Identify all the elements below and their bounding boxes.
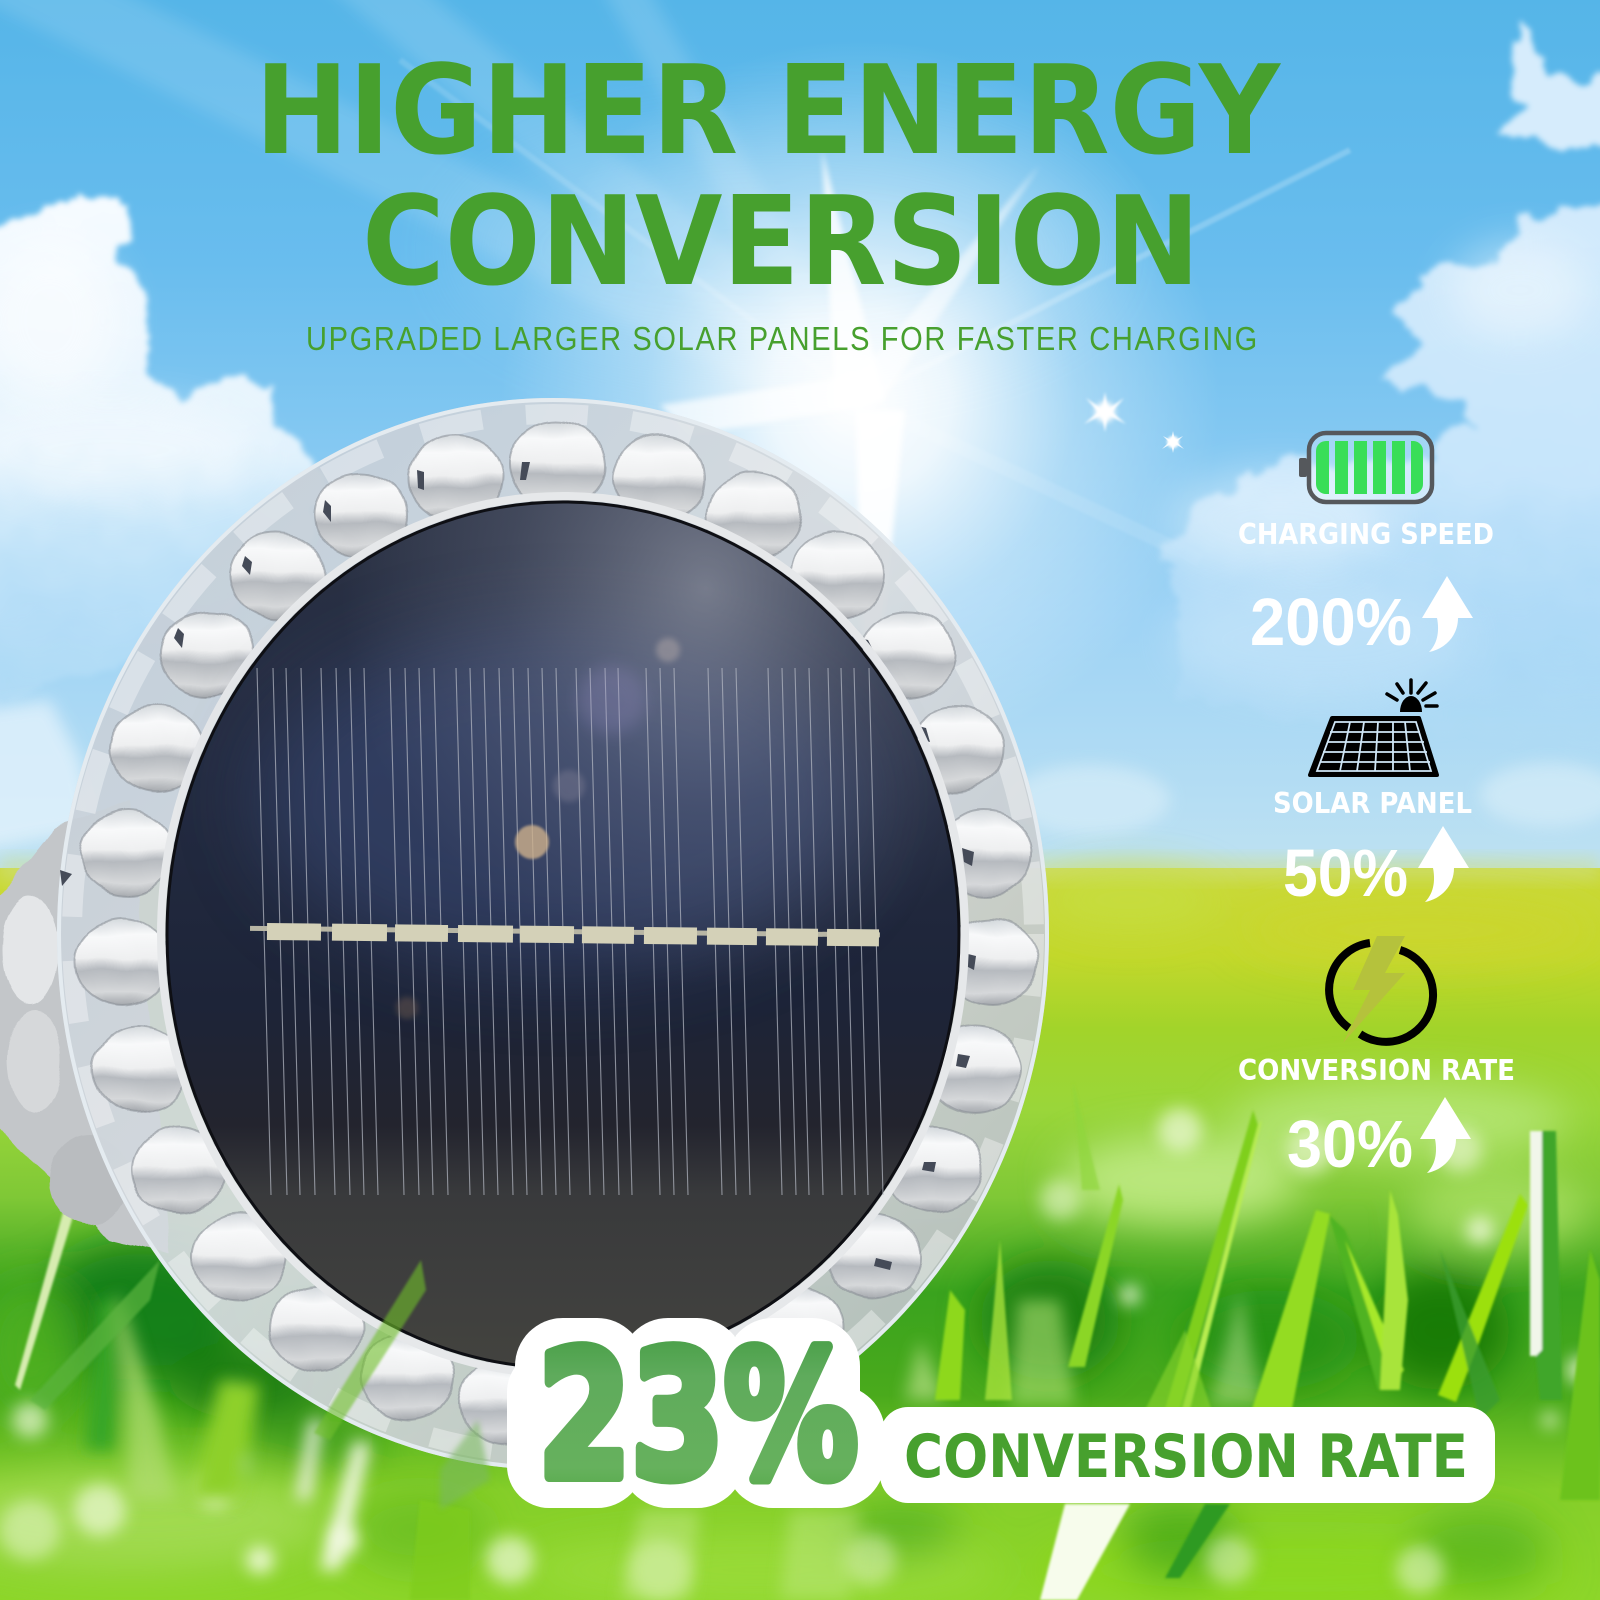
dark glass reflections — [60, 462, 976, 1270]
panel grid lines — [257, 668, 883, 1195]
grass blades — [15, 1082, 1600, 1600]
white sticker backing — [507, 1318, 1495, 1508]
value: 200% — [1250, 585, 1412, 660]
sparkles — [1084, 392, 1184, 453]
stat: conversion rate — [1238, 936, 1515, 1182]
solar lamp head — [57, 398, 1049, 1470]
solar panel disc — [167, 502, 959, 1368]
glass bumps — [75, 422, 1039, 1445]
clouds — [0, 25, 1600, 850]
busbar — [250, 923, 880, 946]
arrow — [1418, 826, 1469, 902]
value: 30% — [1287, 1107, 1413, 1182]
light streaks — [0, 0, 860, 400]
icon: solar panel with sun — [1310, 680, 1437, 775]
glass ring — [57, 398, 1049, 1470]
icon: power ring with lightning bolt — [1329, 936, 1433, 1043]
meadow — [0, 868, 1600, 1600]
thin rays — [400, 60, 1350, 560]
sky — [0, 0, 1600, 880]
subtitle: UPGRADED LARGER SOLAR PANELS FOR FASTER CHARGING — [306, 320, 1257, 357]
bokeh highlights — [0, 1108, 1594, 1600]
stat: charging speed — [1238, 433, 1494, 660]
blades in front of the lamp — [314, 1260, 490, 1510]
meadow blurred patches — [0, 870, 1600, 1600]
title: HIGHER ENERGY — [255, 40, 1282, 183]
label: SOLAR PANEL — [1273, 787, 1472, 820]
sun glow and rays — [460, 40, 1220, 760]
value: 50% — [1283, 836, 1408, 911]
caption: CONVERSION RATE — [904, 1422, 1468, 1492]
callout: 23% conversion rate — [507, 1316, 1495, 1518]
title: CONVERSION — [362, 171, 1200, 314]
label: CONVERSION RATE — [1238, 1054, 1515, 1087]
stat: solar panel — [1273, 680, 1472, 911]
title — [255, 40, 1282, 314]
smooth glass rim — [57, 398, 1049, 1470]
soft out-of-focus blades — [85, 1290, 1262, 1600]
label: CHARGING SPEED — [1238, 518, 1494, 551]
arrow — [1422, 576, 1473, 652]
solar stake neck behind the lamp — [0, 800, 170, 1255]
arrow — [1420, 1097, 1471, 1173]
big percentage: 23% — [538, 1316, 858, 1518]
icon: battery — [1299, 433, 1432, 502]
lens flares — [396, 638, 680, 1019]
